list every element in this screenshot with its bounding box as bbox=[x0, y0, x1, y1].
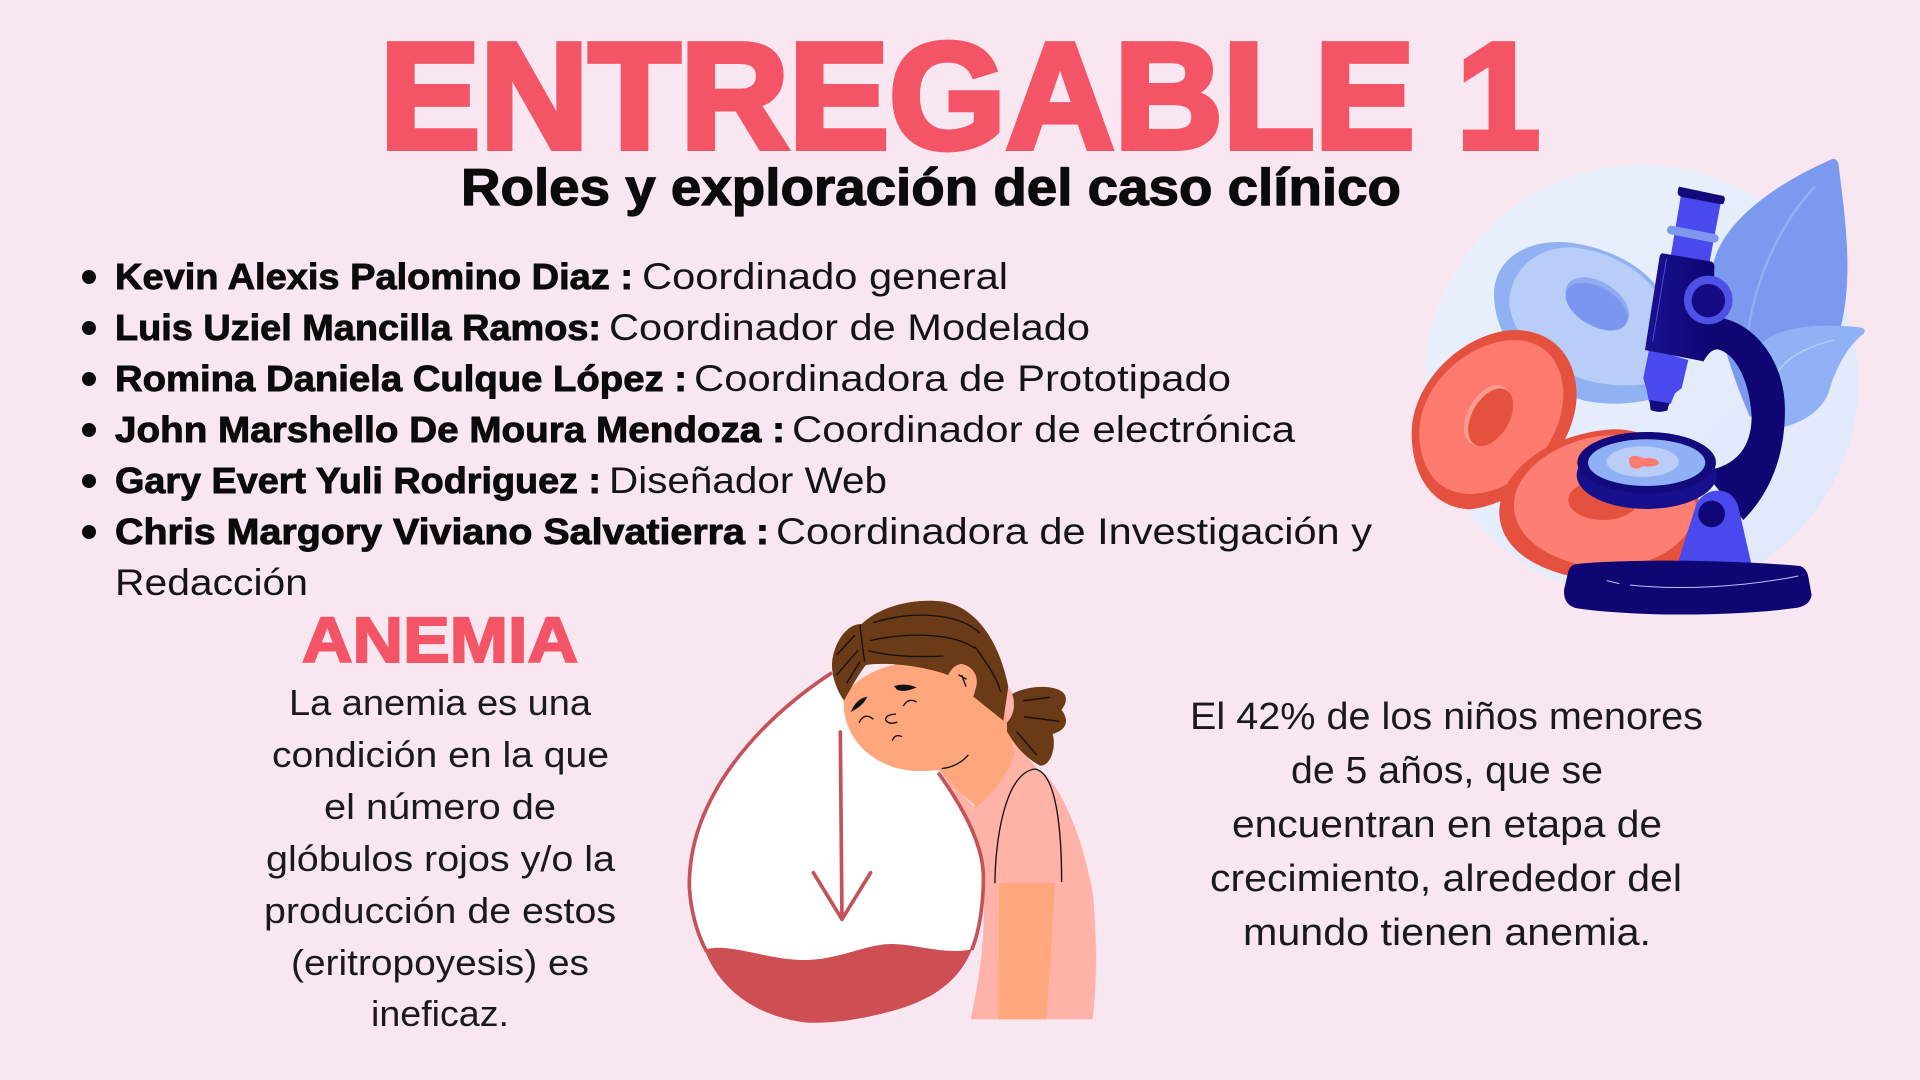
arrow down bbox=[813, 732, 871, 919]
team roles list: Luis Uziel Mancilla Ramos: bbox=[115, 307, 601, 348]
team roles list: Coordinado general bbox=[642, 256, 1008, 297]
team roles list: Diseñador Web bbox=[609, 460, 887, 501]
text: anemia definition: La anemia es una bbox=[289, 682, 592, 723]
focus knob bbox=[1684, 276, 1733, 324]
team roles list: Coordinador de Modelado bbox=[609, 307, 1090, 348]
title: ENTREGABLE 1 bbox=[380, 11, 1540, 180]
ear bbox=[949, 664, 977, 696]
text: child anemia statistic: El 42% de los niños menores bbox=[1190, 696, 1703, 738]
hair bbox=[832, 601, 1008, 721]
text: child anemia statistic bbox=[1190, 696, 1703, 954]
text: child anemia statistic: encuentran en etapa de bbox=[1232, 804, 1662, 846]
subtitle: Roles y exploración del caso clínico bbox=[461, 159, 1401, 217]
background circle bbox=[1425, 165, 1858, 598]
objective lens bbox=[1643, 348, 1688, 404]
team roles list: Redacción bbox=[115, 562, 308, 603]
team roles list: Gary Evert Yuli Rodriguez : bbox=[115, 460, 601, 501]
text: anemia definition: glóbulos rojos y/o la bbox=[266, 838, 616, 879]
text: child anemia statistic: crecimiento, alrededor del bbox=[1210, 858, 1682, 900]
team roles list bbox=[82, 256, 1373, 603]
microscope stage bbox=[1577, 441, 1717, 509]
team roles list: Romina Daniela Culque López : bbox=[115, 358, 687, 399]
arm bbox=[998, 883, 1055, 1019]
red blood cell left bbox=[1412, 330, 1577, 509]
body bbox=[940, 723, 1096, 1019]
microscope head bbox=[1645, 253, 1714, 361]
text: anemia definition: producción de estos bbox=[264, 890, 616, 931]
red blood cell right bbox=[1499, 429, 1700, 578]
team roles list: Coordinadora de Investigación y bbox=[776, 511, 1373, 552]
team roles list: Chris Margory Viviano Salvatierra : bbox=[115, 511, 769, 552]
team roles list: Kevin Alexis Palomino Diaz : bbox=[115, 256, 633, 297]
head bbox=[844, 661, 1007, 771]
heading: anemia: ANEMIA bbox=[302, 604, 578, 676]
blood drop bbox=[689, 673, 983, 980]
team roles list: John Marshello De Moura Mendoza : bbox=[115, 409, 785, 450]
text: child anemia statistic: de 5 años, que se bbox=[1291, 750, 1603, 792]
text: anemia definition bbox=[264, 682, 616, 1034]
text: anemia definition: el número de bbox=[324, 786, 556, 827]
hair strands and face lines bbox=[837, 615, 1001, 692]
eyepiece tube bbox=[1671, 195, 1721, 263]
text: anemia definition: ineficaz. bbox=[371, 993, 509, 1034]
team roles list: Coordinador de electrónica bbox=[792, 409, 1295, 450]
microscope base bbox=[1564, 561, 1812, 615]
text: anemia definition: condición en la que bbox=[272, 734, 609, 775]
text: child anemia statistic: mundo tienen anemia. bbox=[1243, 912, 1651, 954]
blue blood cell bbox=[1494, 242, 1663, 404]
big leaf bbox=[1713, 159, 1847, 417]
team roles list: Coordinadora de Prototipado bbox=[694, 358, 1231, 399]
illustration: microscope with blood cells bbox=[1412, 159, 1865, 615]
text: anemia definition: (eritropoyesis) es bbox=[291, 942, 589, 983]
microscope pillar bbox=[1677, 491, 1752, 570]
ponytail bbox=[1003, 687, 1066, 766]
neck bbox=[937, 723, 1015, 807]
small leaf bbox=[1757, 326, 1865, 428]
scrunchie bbox=[1002, 688, 1014, 725]
microscope arm bbox=[1680, 317, 1785, 520]
illustration: girl with blood drop bbox=[689, 601, 1096, 1023]
